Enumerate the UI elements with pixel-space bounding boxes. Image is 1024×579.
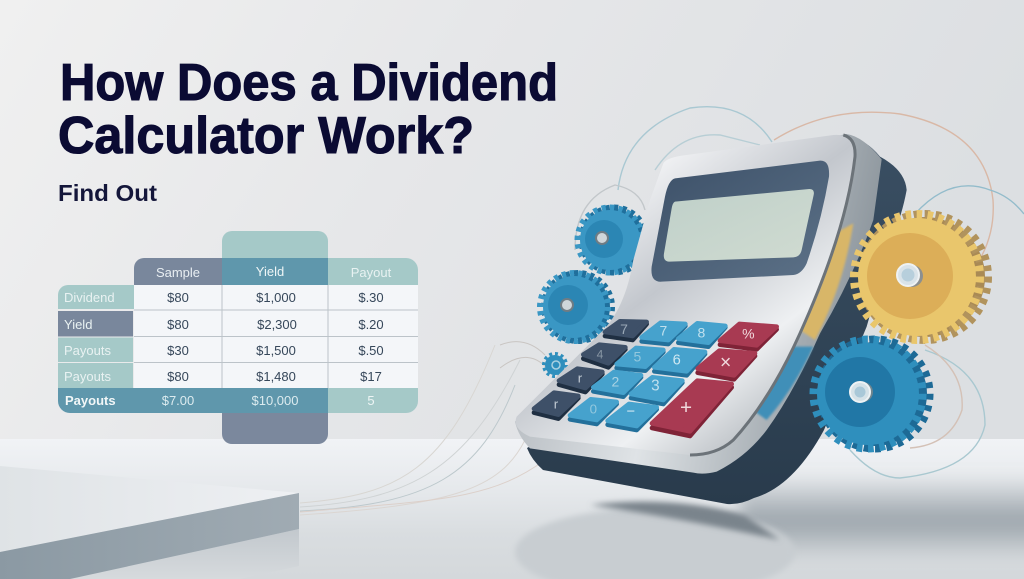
table values: $1,500 [256,343,296,358]
title: How Does a Dividend [60,54,558,112]
key: dark r [559,369,602,392]
table values: $.50 [358,343,384,358]
key: blue 3 [631,377,682,404]
table body cells [134,285,418,388]
table total row: $10,000 [252,393,298,408]
table values [167,290,384,384]
table header row: Sample [156,265,200,280]
key: blue 7: 7 [659,322,667,338]
LCD screen [664,189,814,262]
chrome rim [690,135,855,455]
title: Calculator Work? [58,107,474,165]
key: dark 7: 7 [620,321,628,337]
key: blue 3: 3 [651,378,660,395]
key: blue 7 [642,322,685,344]
key: dark r: r [578,371,583,386]
table values: $1,480 [256,369,296,384]
row headers: Payouts [64,343,111,358]
row headers [58,285,134,388]
key: blue 8: 8 [697,324,705,340]
display frame [651,161,829,282]
key: blue 6 [654,349,705,375]
table total row: Payouts [65,393,116,408]
row headers: Yield [64,317,92,332]
calculator face [516,135,855,455]
table header row [134,258,418,285]
key: blue minus [608,404,657,430]
floor surface [0,439,1024,579]
key: blue 0 [570,399,617,424]
curved decorative wires around gears [575,107,1024,478]
table values: $80 [167,369,189,384]
key: blue 5 [617,348,663,371]
table values: $1,000 [256,290,296,305]
table values: $30 [167,343,189,358]
key: dark 4: 4 [597,348,604,362]
gear: top left blue [579,209,645,271]
key: dark 7 [605,321,647,340]
key: large red plus [652,381,732,436]
key: blue 8 [678,323,725,347]
table total row: 5 [367,393,375,408]
key: blue minus: − [626,404,635,420]
gear: yellow [857,217,985,337]
key: blue 2: 2 [611,374,619,390]
key: blue 0: 0 [590,401,597,416]
row headers: Dividend [64,290,115,305]
dividend table [58,231,418,444]
title [58,54,558,165]
table total row [58,388,418,413]
key: red multiply [698,351,755,379]
key: red multiply: × [720,352,731,373]
table values: $2,300 [257,317,297,332]
key: blue 2 [593,372,641,397]
table total row: $7.00 [162,393,194,408]
table header row: Yield [256,264,284,279]
key: dark r lower [534,393,578,419]
key: blue 5: 5 [633,349,641,365]
table values: $80 [167,290,189,305]
gear: small blue [544,354,566,376]
table values: $80 [167,317,189,332]
key: large red plus: + [680,396,692,419]
gear: bottom blue [816,342,927,446]
key: dark r lower: r [554,397,559,412]
calculator floor shadow [515,475,1024,579]
bevel colour reflections [743,223,853,420]
gear: middle left blue [542,275,610,339]
calculator [515,134,907,504]
table values: $17 [360,369,382,384]
table header row: Payout [351,265,392,280]
highlighted yield column [222,231,328,444]
slab platform [0,466,299,579]
key: red percent [720,324,777,349]
key: red percent: % [742,326,755,342]
row headers: Payouts [64,369,111,384]
key: blue 6: 6 [673,352,681,368]
flowing thread lines [300,342,550,515]
key: dark 4 [583,345,625,367]
table values: $.30 [358,290,384,305]
subtitle: Find Out [58,180,157,206]
keypad [534,321,777,436]
table values: $.20 [358,317,384,332]
background wall [0,0,1024,439]
